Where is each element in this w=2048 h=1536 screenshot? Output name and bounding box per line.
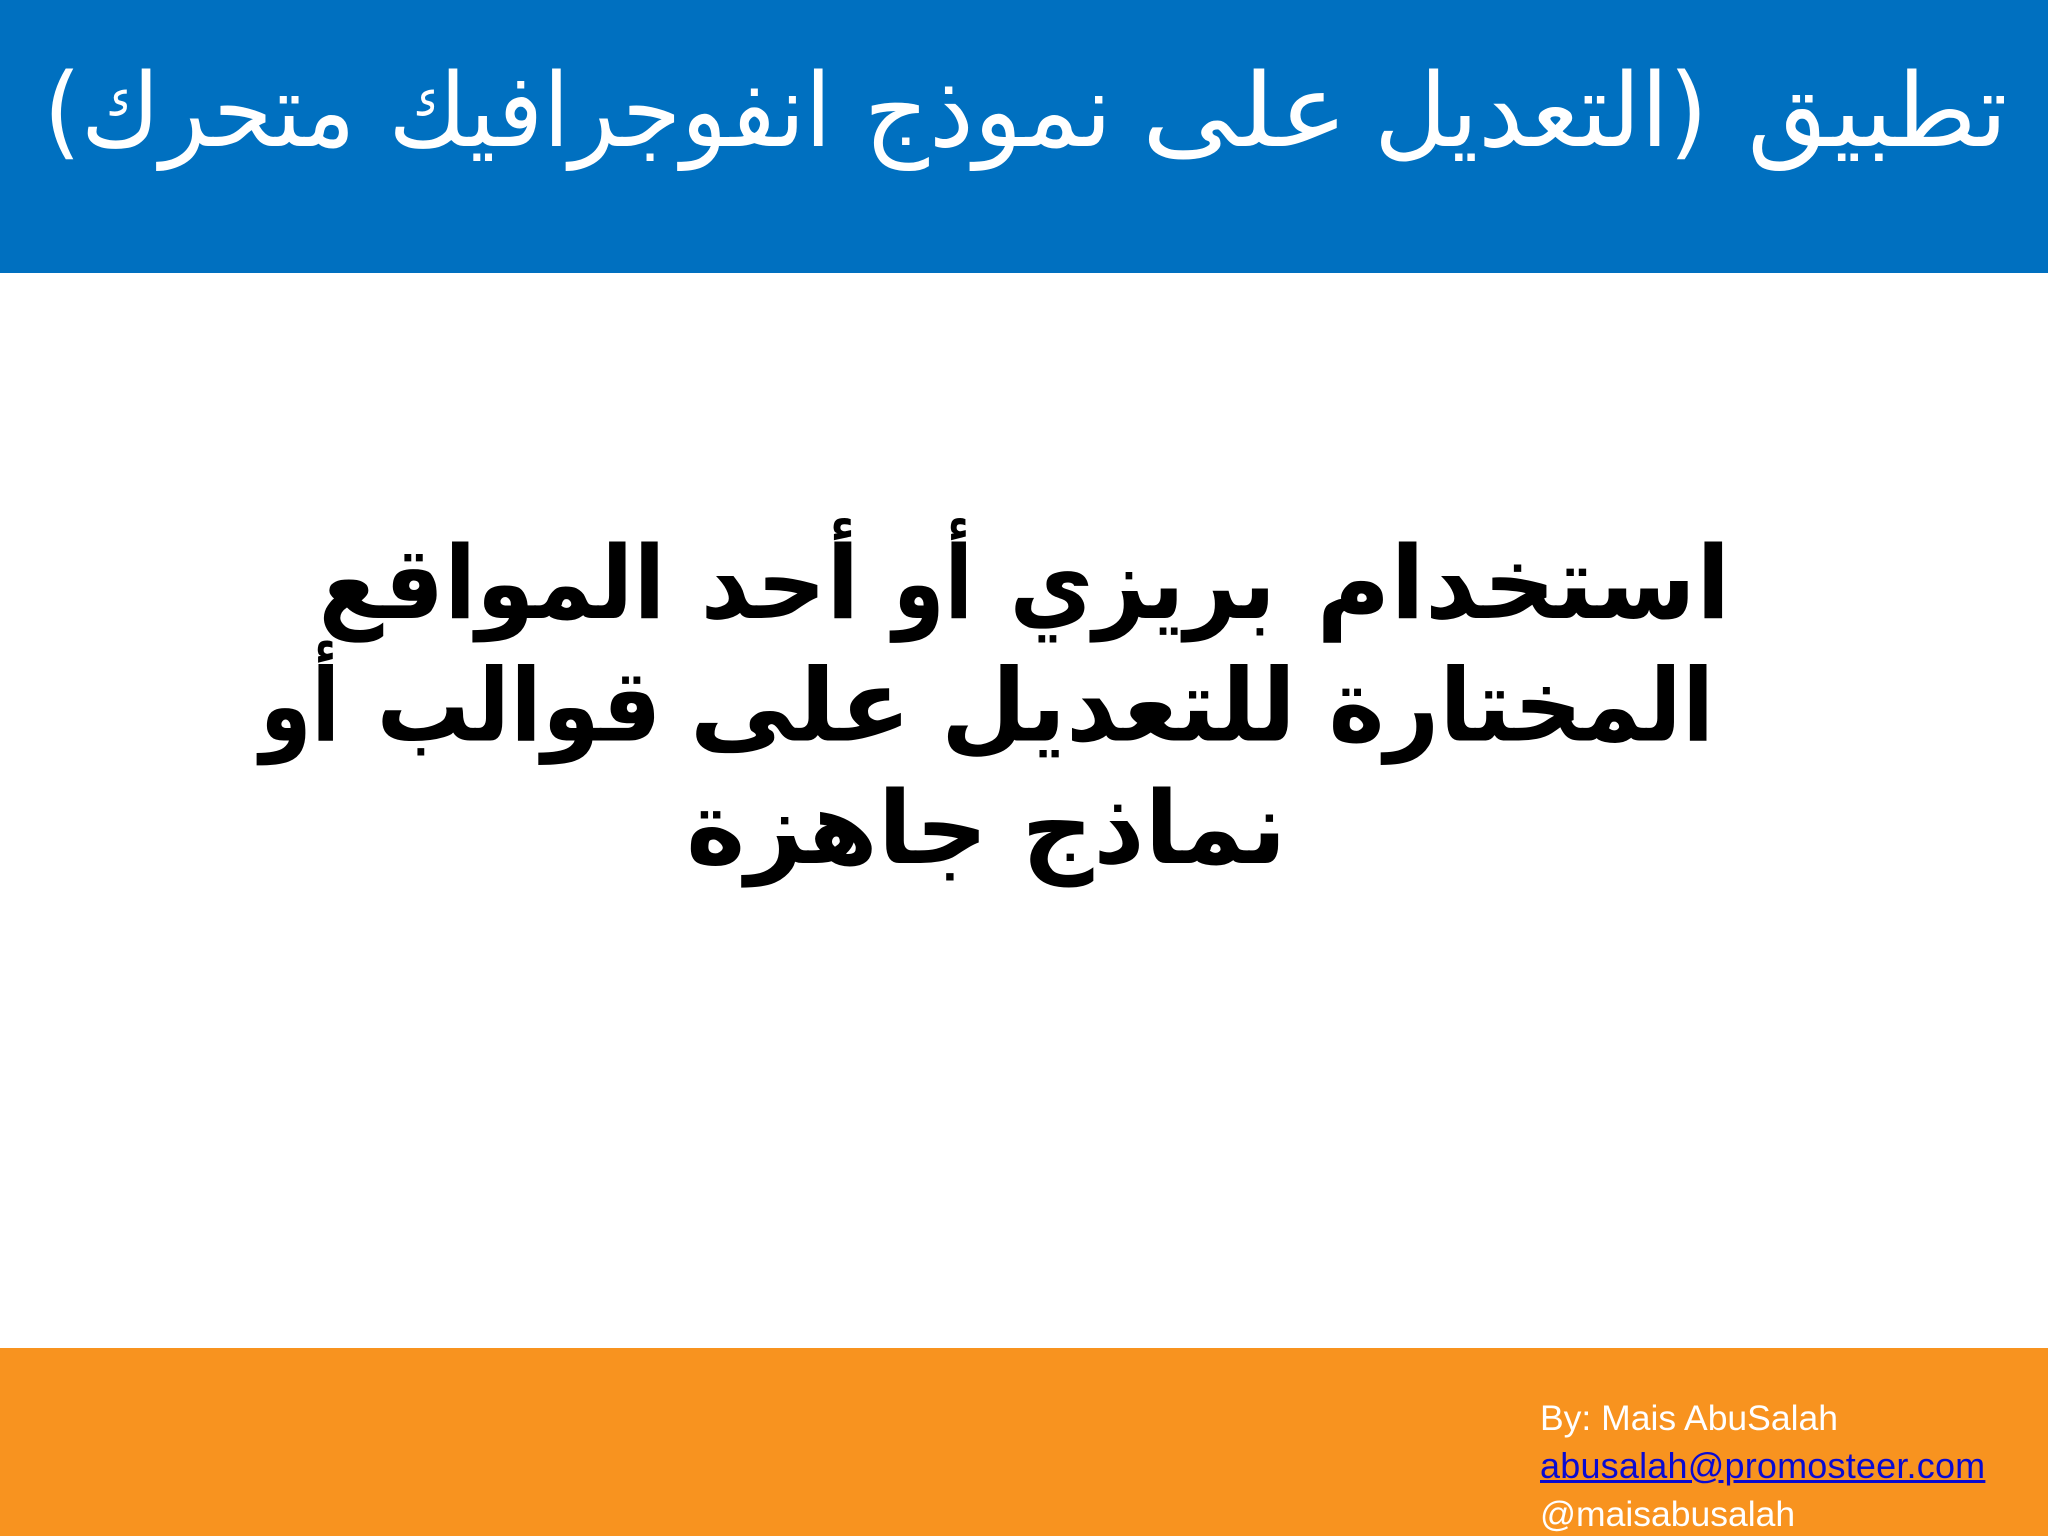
title <box>44 52 2008 171</box>
body text: استخدام <box>1316 524 1730 642</box>
body text: جاهزة <box>686 769 988 888</box>
author credit: By: Mais AbuSalah <box>1540 1398 1838 1438</box>
title: انفوجرافيك <box>388 52 832 171</box>
body text: المختارة <box>1328 646 1714 766</box>
body text: المواقع <box>318 524 666 643</box>
body text: قوالب <box>376 646 662 766</box>
author credit <box>1540 1398 1986 1534</box>
body text: أو <box>889 517 973 643</box>
body text: بريزي <box>1010 524 1276 643</box>
title: على <box>1142 52 1348 171</box>
title: (التعديل <box>1374 52 1708 171</box>
body text: للتعديل <box>941 646 1296 764</box>
body text: على <box>690 646 912 764</box>
body text <box>256 517 1730 888</box>
author credit: abusalah@promosteer.com <box>1540 1445 1985 1486</box>
footer band <box>0 1348 2048 1536</box>
header band <box>0 0 2048 273</box>
body text: أحد <box>700 517 860 642</box>
body text: نماذج <box>1022 769 1286 888</box>
title: متحرك) <box>44 52 356 171</box>
title: تطبيق <box>1748 52 2008 171</box>
title: نموذج <box>864 52 1112 171</box>
author credit: @maisabusalah <box>1540 1494 1795 1534</box>
body text: أو <box>256 640 340 766</box>
